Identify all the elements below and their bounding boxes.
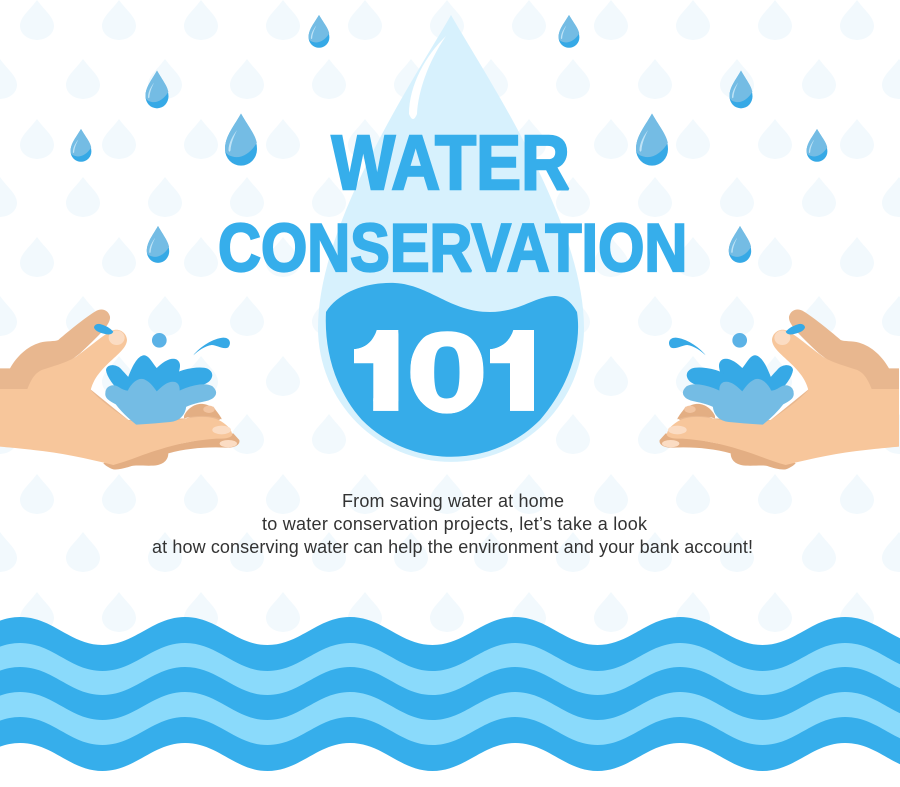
large central water drop xyxy=(318,15,584,462)
intro paragraph: From saving water at home xyxy=(342,491,564,511)
intro paragraph: at how conserving water can help the environment and your bank account! xyxy=(152,537,753,557)
intro paragraph xyxy=(152,491,753,557)
number 101: 101 xyxy=(345,309,562,435)
title: WATER xyxy=(332,121,570,206)
icon: left hand holding water splash xyxy=(0,310,239,469)
title: CONSERVATION xyxy=(218,209,687,286)
title xyxy=(218,121,687,286)
coloured falling drops xyxy=(71,15,827,263)
number 101 xyxy=(354,330,534,414)
waves xyxy=(0,617,900,787)
icon: right hand holding water splash xyxy=(660,310,899,469)
intro paragraph: to water conservation projects, let’s take a look xyxy=(262,514,648,534)
